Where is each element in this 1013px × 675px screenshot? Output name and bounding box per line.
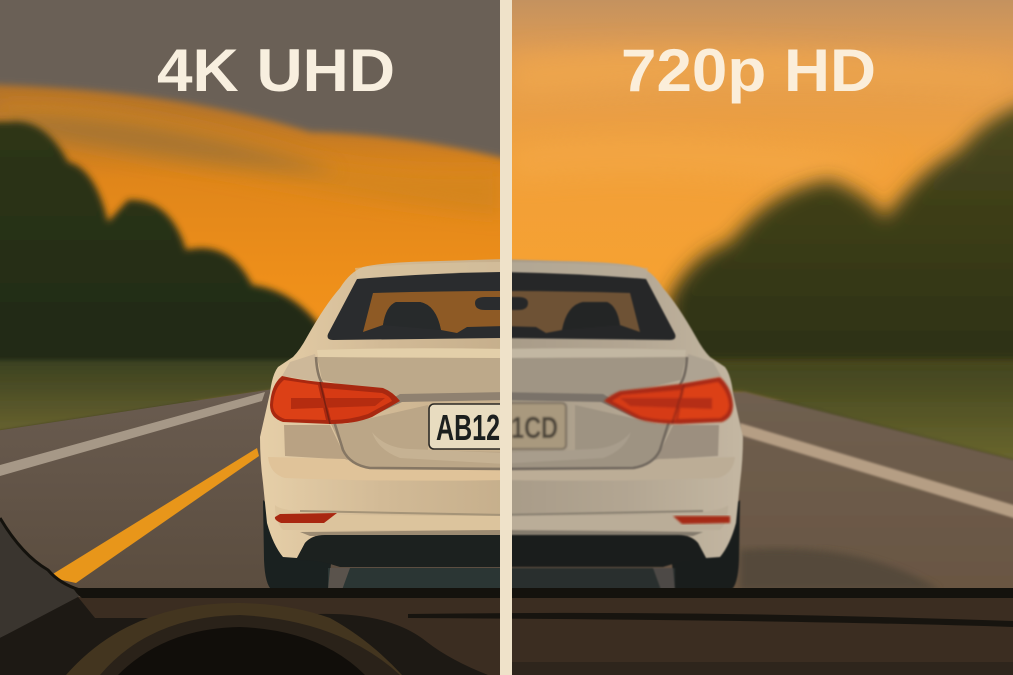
car body — [498, 259, 743, 592]
brown dash top — [78, 597, 1013, 675]
blurred tree line — [668, 100, 1013, 372]
white lane marking — [0, 392, 265, 476]
licence plate sharp — [428, 403, 500, 450]
top black dash edge — [72, 586, 1013, 598]
licence plate sharp: AB12 — [436, 407, 500, 448]
panel: 4K UHD sharp half — [0, 0, 530, 600]
heading: 4K UHD: 4K UHD — [157, 37, 395, 104]
centre divider — [500, 0, 512, 675]
bright horizon wisp — [0, 105, 501, 215]
panel: 720p HD blurred half — [500, 0, 1013, 600]
road surface — [500, 392, 1013, 600]
binnacle hood — [66, 603, 402, 675]
right tail light — [604, 377, 733, 424]
licence plate blurred — [512, 401, 568, 451]
dashboard — [0, 518, 1013, 675]
car: sharp left half — [260, 259, 519, 592]
sunset sky — [500, 0, 1013, 400]
blurred grass — [722, 364, 1013, 461]
car: blurred right half — [490, 259, 743, 592]
dark seam — [408, 613, 1013, 627]
heading: 720p HD: 720p HD — [621, 37, 876, 104]
white lane marking — [740, 423, 1013, 523]
road surface — [0, 385, 501, 600]
pillar edge — [0, 518, 80, 590]
right reflector — [673, 516, 730, 524]
grey cloud streak — [0, 112, 340, 172]
gauge dark — [118, 627, 365, 675]
left tail light — [270, 376, 400, 424]
licence plate blurred: 1CD — [511, 410, 558, 445]
car body — [260, 259, 505, 592]
yellow centre line — [48, 448, 259, 583]
dash lower left — [0, 597, 500, 675]
dark grey cloud bank — [0, 0, 530, 165]
soft sky wisps — [524, 54, 848, 166]
grass verge — [0, 359, 289, 430]
windscreen pillar — [0, 518, 80, 638]
sunset sky — [0, 80, 500, 400]
tree line — [0, 122, 320, 372]
left reflector — [275, 513, 337, 523]
dash recess right — [512, 662, 1013, 675]
gauge surround — [100, 615, 400, 675]
road shadow mound — [740, 548, 940, 590]
